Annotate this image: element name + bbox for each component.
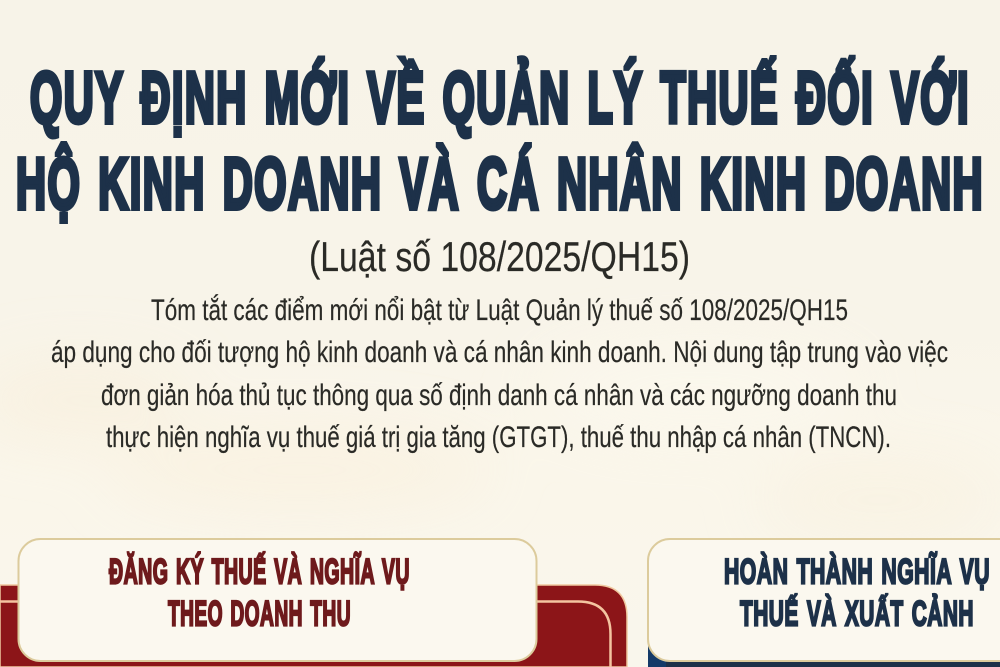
panel: red background: [0, 585, 627, 667]
card: tax registration heading: [18, 539, 536, 661]
card: tax registration heading: ĐĂNG KÝ THUẾ VÀ NGHĨA VỤ: [109, 552, 410, 592]
panel: blue background: [648, 640, 1000, 667]
card: tax registration heading: THEO DOANH THU: [168, 594, 351, 634]
subtitle: law number: (Luật số 108/2025/QH15): [309, 233, 690, 280]
title: [16, 56, 984, 224]
card: obligations and exit heading: [648, 539, 1000, 661]
intro text block: [51, 294, 948, 454]
